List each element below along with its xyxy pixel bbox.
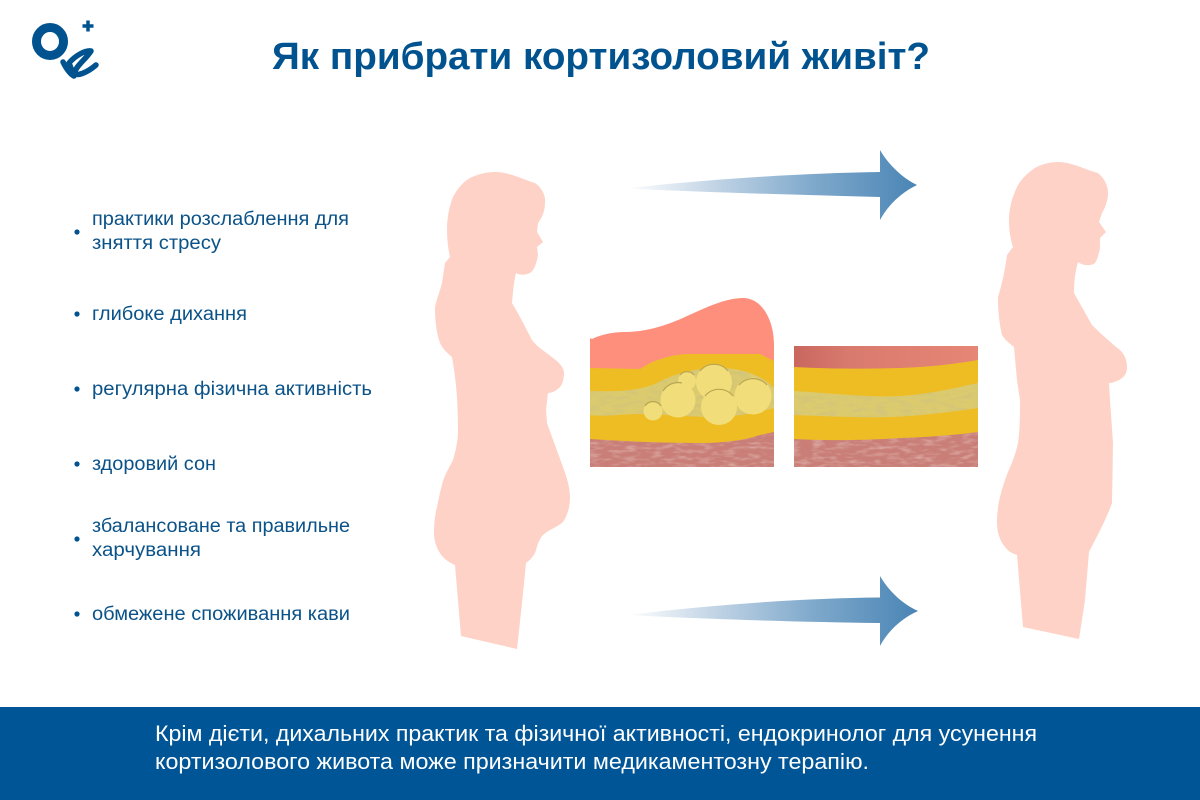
muscle layer (794, 432, 978, 467)
fat cells (644, 364, 772, 425)
item: nutrition (74, 516, 350, 561)
item: nutrition: збалансоване та правильне (92, 516, 350, 537)
silhouette: before (434, 172, 570, 649)
item: coffee: обмежене споживання кави (92, 604, 350, 625)
item: breathing: глибоке дихання (92, 304, 247, 325)
arrow: bottom (628, 576, 918, 646)
epidermis layer (590, 298, 774, 372)
item: relaxation: зняття стресу (92, 233, 222, 254)
fat layer (590, 354, 774, 450)
logo (36, 20, 96, 76)
list: recommendations (74, 209, 372, 625)
tissue texture (794, 383, 978, 417)
footer text: кортизолового живота може призначити медикаментозну терапію. (155, 749, 869, 774)
item: nutrition: харчування (92, 540, 201, 561)
tissue: after (794, 346, 978, 467)
arrow: top (625, 150, 917, 220)
footer text (155, 721, 1037, 774)
footer text: Крім дієти, дихальних практик та фізичної активності, ендокринолог для усунення (155, 721, 1037, 746)
item: relaxation (74, 209, 349, 254)
item: activity: регулярна фізична активність (92, 379, 372, 400)
silhouette: after (997, 162, 1127, 639)
skin layer (794, 346, 978, 376)
footer banner (0, 707, 1200, 800)
fat layer (794, 360, 978, 445)
fat cell shading (645, 364, 767, 406)
tissue: before (590, 298, 774, 467)
item: sleep: здоровий сон (92, 454, 216, 475)
muscle layer (590, 432, 774, 467)
tissue texture (590, 368, 774, 417)
item: relaxation: практики розслаблення для (92, 209, 349, 230)
title: Як прибрати кортизоловий живіт? (272, 36, 930, 78)
